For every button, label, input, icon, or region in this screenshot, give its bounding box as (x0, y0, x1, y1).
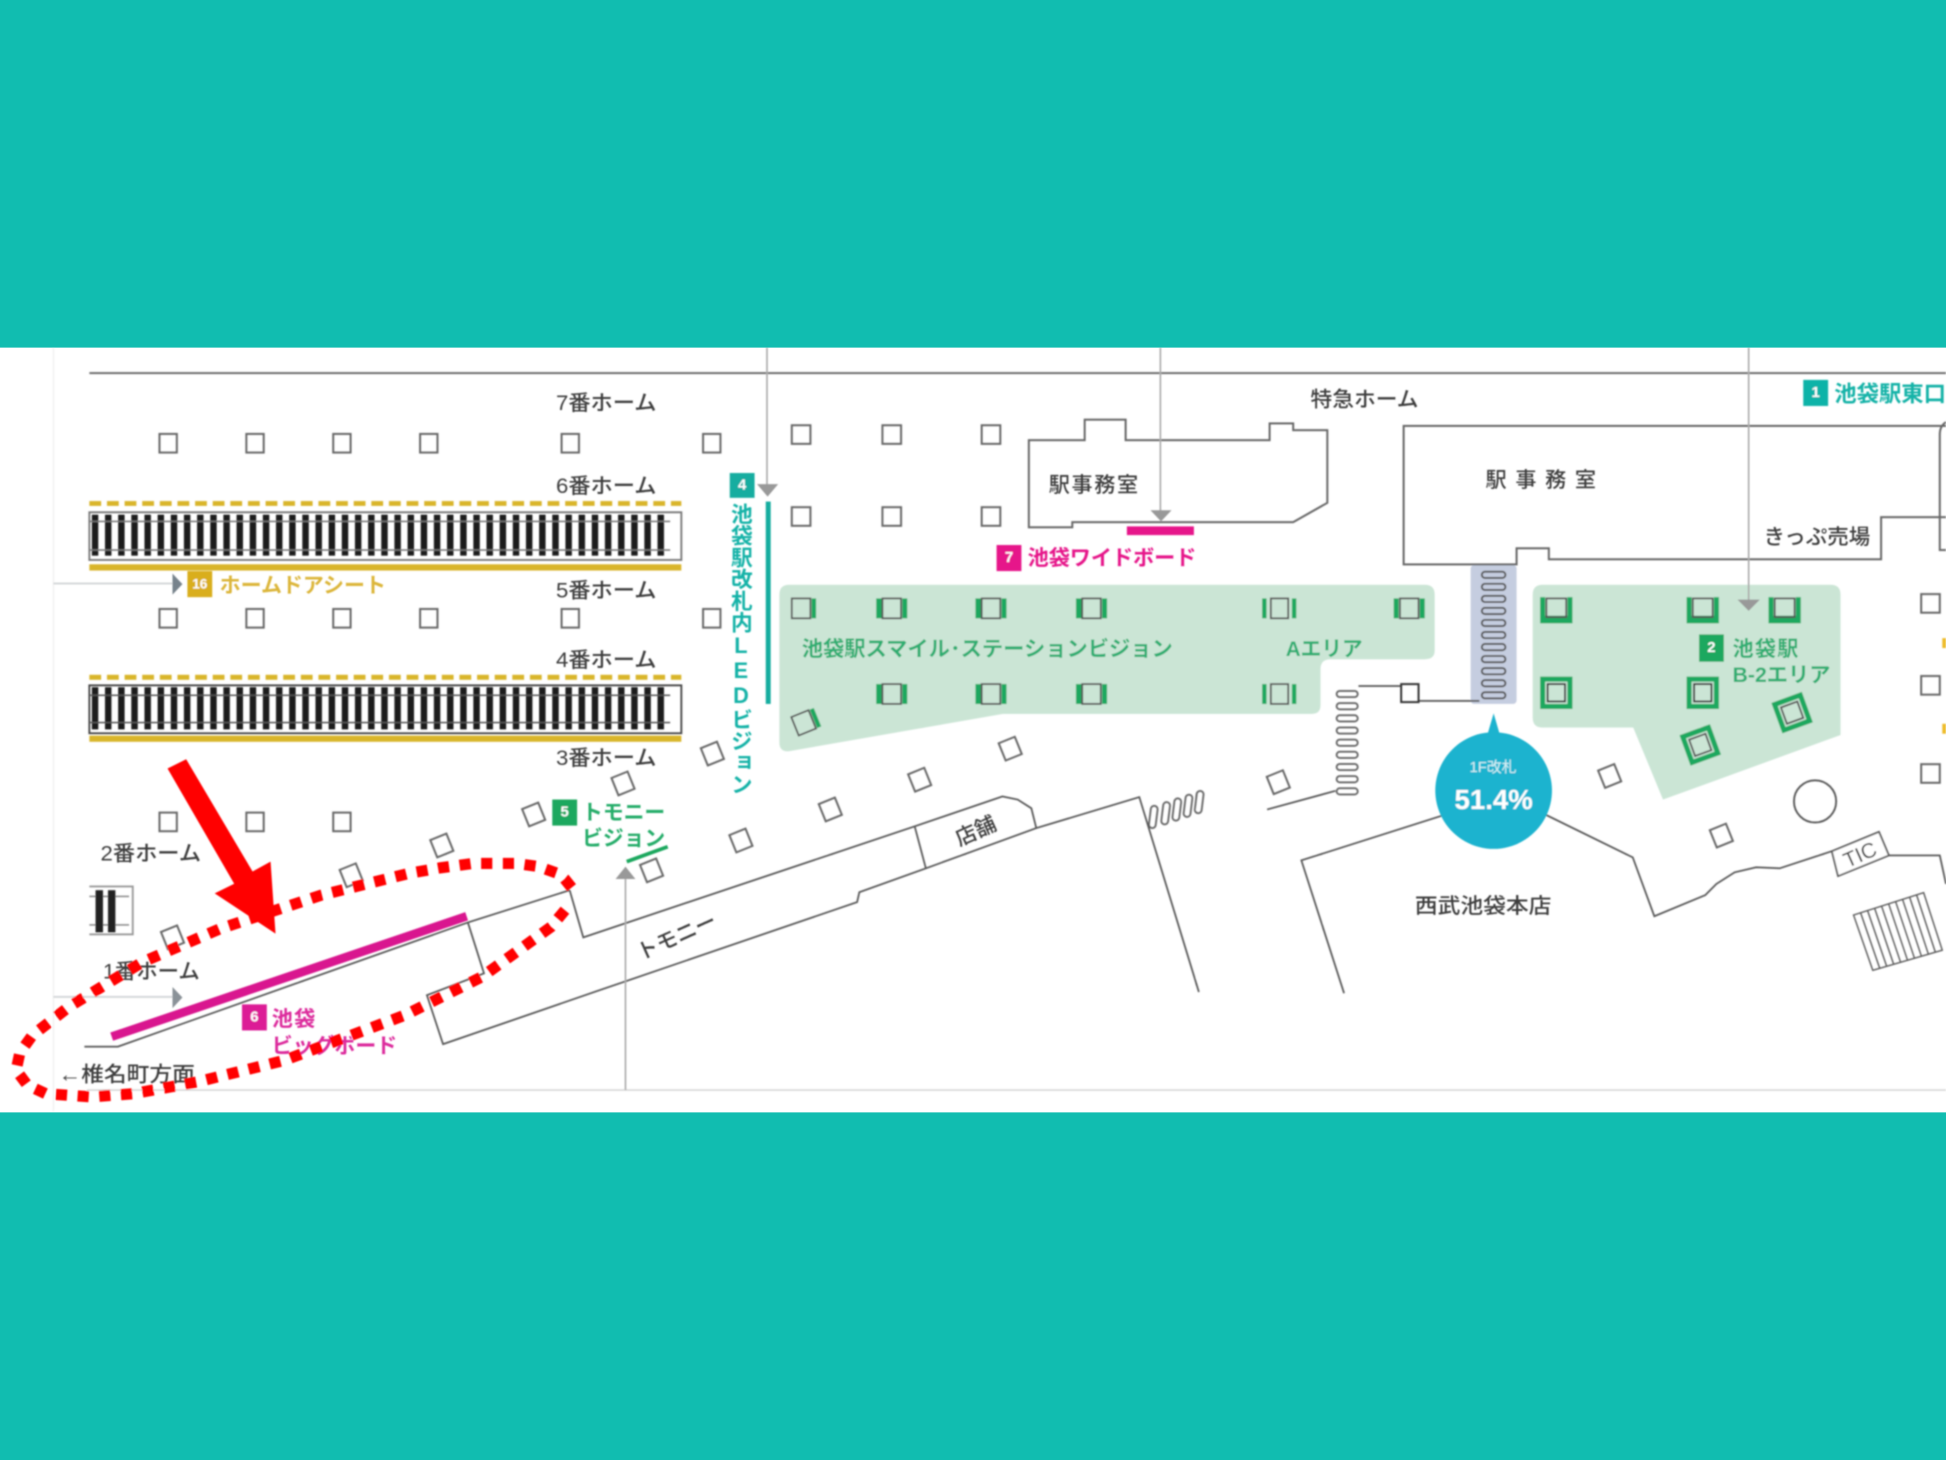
facility labels: 駅事務室 (1486, 468, 1596, 492)
callout: 1F gate 51.4%: 1F改札 (1469, 759, 1517, 776)
green zone: Smile Station Vision A area (779, 585, 1435, 751)
Tomoni vision bar (627, 847, 668, 862)
facility labels: ←椎名町方面 (58, 1063, 195, 1087)
TIC box (1832, 832, 1889, 876)
panel: white map area (0, 348, 1946, 1112)
platform labels: 特急ホーム (1311, 387, 1419, 411)
track: platforms 1-2 (89, 886, 133, 934)
label 6: big board: ビッグボード (272, 1033, 397, 1058)
platform labels: 1番ホーム (103, 960, 200, 984)
label 4: LED vision: 池袋駅改札内LEDビジョン (728, 503, 753, 795)
LED vision bar (766, 502, 771, 704)
pillar by concourse (1401, 684, 1419, 702)
gold edge marks (1942, 638, 1946, 734)
callout: 1F gate 51.4%: 51.4% (1455, 784, 1533, 815)
label 4: LED vision: 4 (738, 477, 747, 493)
label: A area: Aエリア (1286, 638, 1363, 661)
station office: large (1404, 426, 1946, 564)
label: Smile Station Vision: 池袋駅スマイル･ステーションビジョン (802, 637, 1173, 661)
label 7: wide board: 池袋ワイドボード (1028, 546, 1196, 570)
label 7: wide board: 7 (1005, 550, 1013, 566)
big board bar (112, 916, 467, 1037)
leader line: wide board (1150, 348, 1172, 521)
label 16: home door sheet: ホームドアシート (220, 574, 386, 597)
platform labels (101, 387, 1419, 984)
wide board bar (1127, 526, 1194, 535)
platform labels: 3番ホーム (556, 746, 657, 770)
track: platforms 3-4 (89, 677, 681, 739)
label 6: big board (242, 1004, 397, 1058)
stairs: central concourse (1471, 565, 1517, 704)
label 5: Tomoni vision: ビジョン (582, 827, 665, 851)
stairs: left of gate (1337, 691, 1358, 794)
vision screens: A area pillars (791, 598, 1425, 735)
label 16: home door sheet: 16 (192, 577, 208, 592)
leader line: B-2 area (1738, 348, 1760, 611)
platform labels: 5番ホーム (556, 578, 657, 602)
track: platforms 5-6 (89, 503, 681, 567)
leader line: LED vision (757, 348, 778, 497)
building outlines (84, 686, 1946, 1047)
leader line: home door sheet (53, 574, 182, 595)
label 2: B-2 area (1699, 634, 1831, 687)
green zone: B-2 area (1533, 585, 1841, 800)
platform labels: 2番ホーム (101, 842, 201, 866)
pillars: platform rows (159, 425, 1940, 831)
label 6: big board: 6 (250, 1009, 259, 1025)
facility labels (58, 468, 1870, 1087)
label 5: Tomoni vision (552, 800, 665, 851)
station office: small (1029, 420, 1327, 527)
leader line: big board (53, 987, 182, 1008)
label 1: Ikebukuro east exit: 池袋駅東口 (1834, 382, 1946, 407)
facility labels: 西武池袋本店 (1415, 894, 1551, 918)
facility labels: 駅事務室 (1049, 473, 1138, 497)
platform labels: 7番ホーム (556, 391, 657, 415)
map contents (16, 348, 1946, 1111)
stairs: near Seibu (1149, 791, 1204, 828)
label 2: B-2 area: 2 (1707, 640, 1716, 656)
label 5: Tomoni vision: 5 (561, 805, 569, 821)
kiosk circle (1794, 780, 1836, 822)
label 2: B-2 area: 池袋駅 (1733, 637, 1798, 661)
label 1: Ikebukuro east exit: 1 (1812, 385, 1820, 401)
label 5: Tomoni vision: トモニー (582, 802, 665, 825)
platform labels: 6番ホーム (556, 474, 657, 498)
label 2: B-2 area: B-2エリア (1733, 664, 1831, 687)
callout: 1F gate 51.4% (1435, 713, 1552, 849)
TIC box: TIC (1840, 838, 1880, 873)
east wall (1940, 422, 1946, 550)
vision screens: B-2 area pillars (1540, 597, 1813, 766)
label 6: big board: 池袋 (272, 1007, 315, 1031)
platform labels: 4番ホーム (556, 648, 657, 672)
highlight: red dotted loop (16, 863, 572, 1097)
facility labels: 店舗 (952, 812, 1000, 851)
leader line: Tomoni vision (616, 867, 635, 1090)
facility labels: きっぷ売場 (1764, 525, 1870, 549)
facility labels: トモニー (634, 910, 720, 965)
highlight: red arrow (168, 759, 276, 934)
escalator (1854, 893, 1942, 970)
pillars: tilted row (161, 737, 1733, 949)
